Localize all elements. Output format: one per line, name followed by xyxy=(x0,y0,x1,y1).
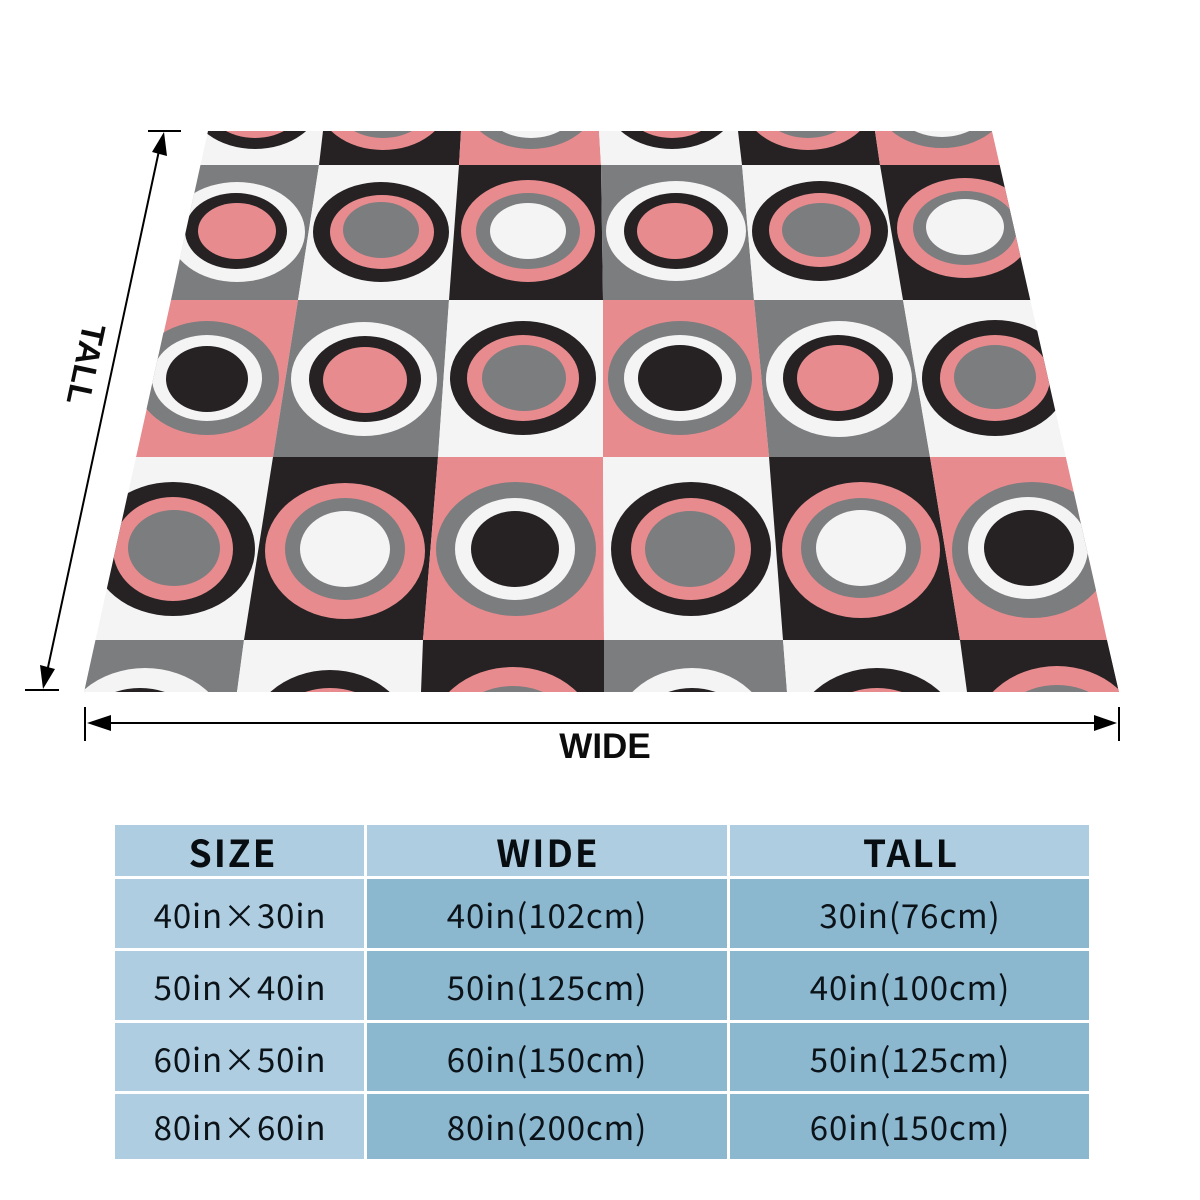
table row 60in x 50in xyxy=(115,1023,1089,1091)
table header row: WIDE xyxy=(496,824,600,878)
table header row xyxy=(115,824,1089,878)
size chart table xyxy=(115,824,1089,1159)
table row 40in x 30in: 30in(76cm) xyxy=(819,890,1001,938)
table header row: TALL xyxy=(863,824,959,878)
wide label: WIDE xyxy=(559,727,651,766)
table row 80in x 60in xyxy=(115,1094,1089,1159)
row 1 partial top row xyxy=(200,131,1000,165)
table row 80in x 60in: 80in×60in xyxy=(154,1102,326,1150)
row 2 of blanket pattern xyxy=(169,165,1033,300)
table row 60in x 50in: 50in(125cm) xyxy=(810,1034,1010,1082)
table row 50in x 40in xyxy=(115,951,1089,1020)
table row 50in x 40in: 50in(125cm) xyxy=(447,962,647,1010)
table header row: SIZE xyxy=(189,824,277,878)
tall dimension arrow xyxy=(25,131,181,690)
table row 40in x 30in: 40in×30in xyxy=(154,890,326,938)
tall label: TALL xyxy=(60,321,113,408)
table row 40in x 30in: 40in(102cm) xyxy=(447,890,647,938)
table row 60in x 50in: 60in(150cm) xyxy=(447,1034,647,1082)
row 5 partial bottom row xyxy=(84,640,1119,692)
table row 80in x 60in: 80in(200cm) xyxy=(447,1102,647,1150)
table row 80in x 60in: 60in(150cm) xyxy=(810,1102,1010,1150)
wide dimension arrow xyxy=(85,707,1119,741)
row 4 of blanket pattern xyxy=(91,457,1112,640)
table row 60in x 50in: 60in×50in xyxy=(154,1034,326,1082)
table row 50in x 40in: 40in(100cm) xyxy=(810,962,1010,1010)
table row 50in x 40in: 50in×40in xyxy=(154,962,326,1010)
row 3 of blanket pattern xyxy=(135,300,1068,457)
blanket with checkerboard and ring pattern xyxy=(84,131,1119,692)
table row 40in x 30in xyxy=(115,879,1089,948)
